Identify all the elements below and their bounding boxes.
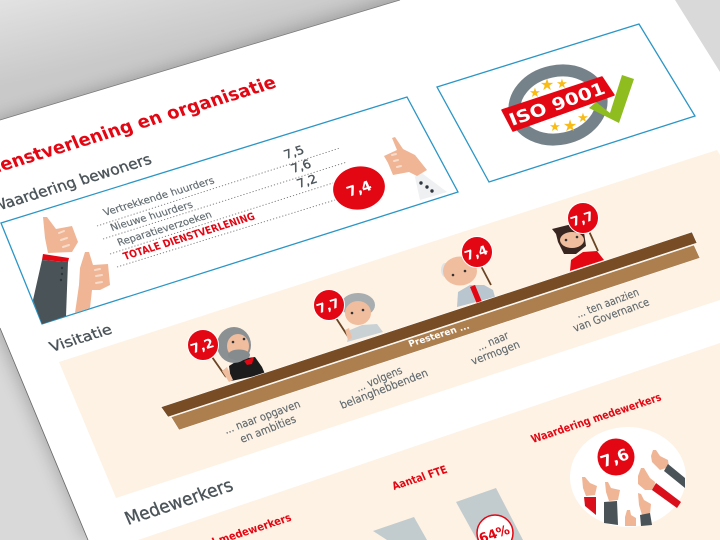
person 2 [314,290,383,342]
label: waardering medewerkers: Waardering medewerkers [529,391,664,446]
icon: ISO seal ring [508,63,608,147]
ISO frame [437,24,695,182]
heading: medewerkers: Medewerkers [122,475,236,530]
person 3: 7,4 [463,243,491,264]
person 4 [552,202,604,271]
person 3 [441,236,495,307]
person 1 [188,327,265,382]
icon: suit hands thumbs up left [33,217,110,324]
circle: waardering medewerkers [570,427,686,527]
table: lower plank [171,245,700,430]
row: reparatieverzoeken: Reparatieverzoeken [116,210,214,249]
score badge 7,4: 7,4 [344,178,375,200]
caption: volgens belanghebbenden: ... volgens [354,364,404,395]
person 4: 7,7 [569,209,597,230]
icon: thumb up right [384,137,447,200]
value 7,6: 7,6 [289,157,313,176]
row: nieuwe huurders: Nieuwe huurders [109,200,195,234]
bar chart: FTE [373,488,523,540]
caption: opgaven en ambities [222,398,302,446]
ISO red band [502,77,614,131]
bar badge 64% [477,515,513,540]
panel: waardering bewoners [1,97,458,324]
panel: medewerkers [138,343,720,540]
score badge 7,4 [330,162,388,214]
label: aantal FTE: Aantal FTE [390,463,449,493]
row: totale dienstverlening: TOTALE DIENSTVERLENING [121,211,257,263]
icon: stars: ★ [549,120,561,135]
icon: stars: ★ [529,86,541,101]
caption: opgaven en ambities: ... naar opgaven [222,398,302,437]
dotted row lines [97,148,347,267]
icon: raised thumbs [582,450,685,526]
table label: Presteren ... [407,322,471,350]
caption: opgaven en ambities: en ambities [238,412,298,446]
table: top plank [161,232,697,417]
row: vertrekkende huurders: Vertrekkende huurders [102,176,216,219]
icon: stars [529,75,589,135]
caption: naar vermogen: vermogen [469,338,522,368]
caption: volgens belanghebbenden: belanghebbenden [338,366,430,412]
person 1: 7,2 [189,336,217,357]
panel: ISO 9001 [437,24,695,182]
caption: ten aanzien van Governance: van Governance [571,296,652,335]
panel background [59,150,720,498]
value 7,5: 7,5 [282,143,306,162]
heading: visitatie: Visitatie [47,322,115,356]
panel background [138,343,720,540]
icon: green check [589,75,634,123]
panel: visitatie [59,150,720,498]
icon: stars: ★ [563,116,577,135]
ISO label: ISO 9001 [506,79,608,131]
person 2: 7,7 [315,296,343,317]
panel frame [1,97,458,324]
icon: stars: ★ [540,75,554,94]
score badge 7,6: 7,6 [598,445,632,471]
icon: stars: ★ [577,111,589,126]
icon: stars: ★ [556,77,568,92]
caption: naar vermogen: ... naar [475,329,511,354]
value 7,2: 7,2 [295,172,319,191]
caption: ten aanzien van Governance: ... ten aanzien [574,286,641,321]
